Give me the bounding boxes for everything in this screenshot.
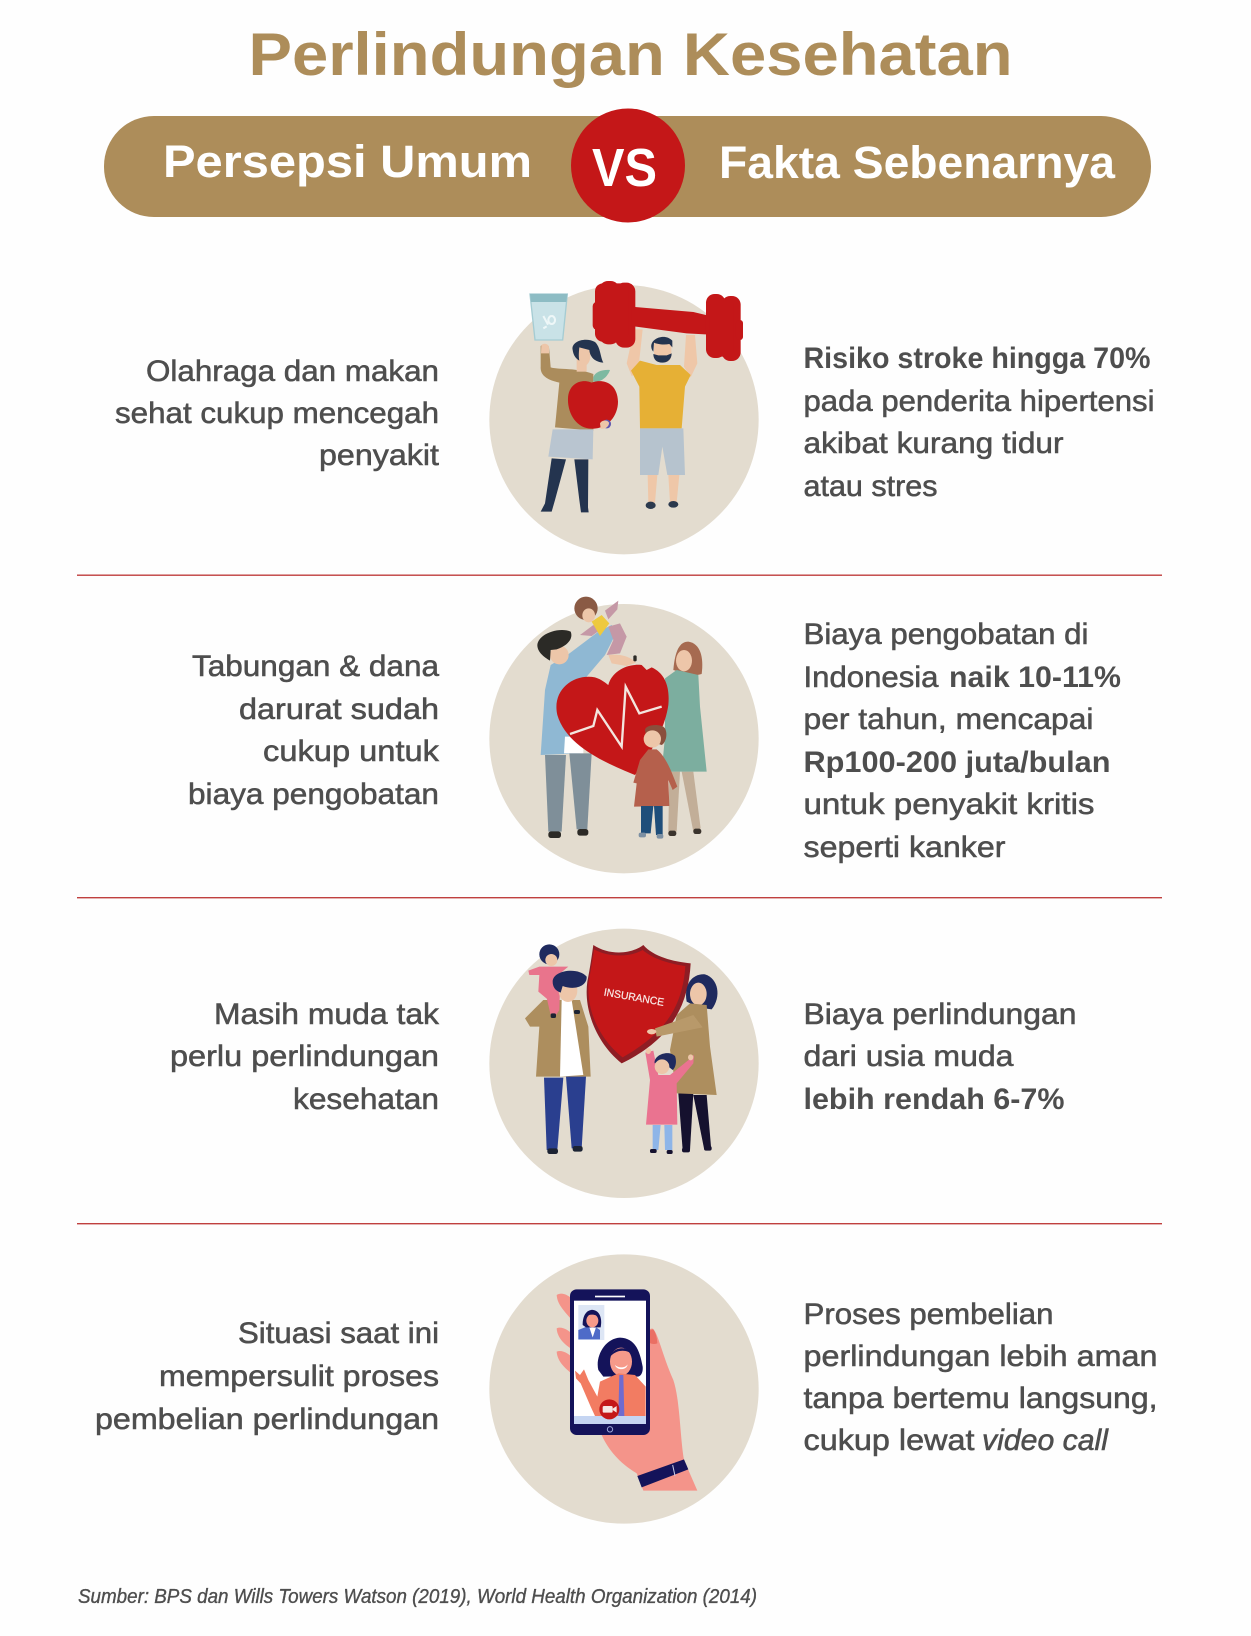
- panel: row 1 perception text: Olahraga dan makan: [146, 355, 439, 388]
- panel: row 3 perception text: kesehatan: [293, 1083, 439, 1116]
- panel: row 1 fact text: pada penderita hipertensi: [804, 385, 1154, 418]
- panel: row 1 fact text: [804, 342, 1154, 503]
- panel: row 3 fact text: [804, 998, 1076, 1116]
- panel: row 1 perception text: [115, 355, 440, 472]
- panel: row 2 perception text: darurat sudah: [239, 693, 439, 726]
- panel: row 3 perception text: [170, 998, 440, 1116]
- panel: row 2 fact text: per tahun, mencapai: [804, 703, 1094, 736]
- panel: row 4 fact text: cukup lewat: [804, 1424, 975, 1457]
- panel: row 1 fact text: atau stres: [804, 470, 938, 503]
- panel: row 1 fact text: akibat kurang tidur: [804, 427, 1064, 460]
- panel: row 2 fact text: Rp100-200 juta/bulan: [804, 746, 1110, 779]
- panel: row 2 perception text: cukup untuk: [263, 735, 440, 768]
- header banner: Persepsi Umum VS Fakta Sebenarnya: VS: [592, 138, 657, 198]
- icon: family holding insurance shield illustration: [489, 929, 759, 1198]
- header banner: Persepsi Umum VS Fakta Sebenarnya: Fakta Sebenarnya: [719, 137, 1116, 188]
- source note: Sumber: BPS dan Wills Towers Watson (2019), World Health Organization (2014): [78, 1586, 757, 1608]
- panel: row 3 perception text: perlu perlindungan: [170, 1040, 439, 1073]
- shield label: INSURANCE: [603, 986, 665, 1009]
- panel: row 4 perception text: mempersulit proses: [159, 1360, 439, 1393]
- panel: row 2 fact text: naik 10-11%: [949, 661, 1121, 694]
- panel: row 3 fact text: Biaya perlindungan: [804, 998, 1076, 1031]
- icon: exercise and healthy food illustration: [489, 281, 759, 554]
- panel: row 4 fact text: video call: [982, 1424, 1109, 1457]
- panel: row 2 fact text: untuk penyakit kritis: [804, 788, 1094, 821]
- title: Perlindungan Kesehatan: [248, 21, 1012, 88]
- header banner: Persepsi Umum VS Fakta Sebenarnya: Persepsi Umum: [163, 136, 532, 187]
- panel: row 3 perception text: Masih muda tak: [214, 998, 440, 1031]
- panel: row 3 fact text: lebih rendah 6-7%: [804, 1083, 1064, 1116]
- panel: row 2 perception text: biaya pengobatan: [188, 778, 439, 811]
- icon: family holding heart illustration: [489, 597, 759, 873]
- panel: row 1 perception text: sehat cukup mencegah: [115, 397, 439, 430]
- panel: row 2 fact text: Biaya pengobatan di: [804, 618, 1088, 651]
- panel: row 4 perception text: Situasi saat ini: [238, 1317, 439, 1350]
- panel: row 4 fact text: perlindungan lebih aman: [804, 1340, 1158, 1373]
- icon: hand holding phone with video call illustration: [489, 1254, 759, 1524]
- panel: row 1 perception text: penyakit: [319, 439, 440, 472]
- panel: row 2 perception text: Tabungan & dana: [192, 650, 439, 683]
- panel: row 3 fact text: dari usia muda: [804, 1040, 1014, 1073]
- panel: row 2 fact text: [804, 618, 1121, 864]
- panel: row 4 fact text: tanpa bertemu langsung,: [804, 1382, 1158, 1415]
- panel: row 4 perception text: pembelian perlindungan: [95, 1403, 439, 1436]
- panel: row 2 fact text: seperti kanker: [804, 831, 1006, 864]
- panel: row 2 perception text: [188, 650, 440, 811]
- panel: row 1 fact text: Risiko stroke hingga 70%: [804, 342, 1150, 375]
- panel: row 4 perception text: [95, 1317, 439, 1436]
- panel: row 2 fact text: Indonesia: [804, 661, 939, 694]
- panel: row 4 fact text: [804, 1298, 1158, 1457]
- panel: row 4 fact text: Proses pembelian: [804, 1298, 1054, 1331]
- header banner: Persepsi Umum VS Fakta Sebenarnya: [104, 108, 1151, 222]
